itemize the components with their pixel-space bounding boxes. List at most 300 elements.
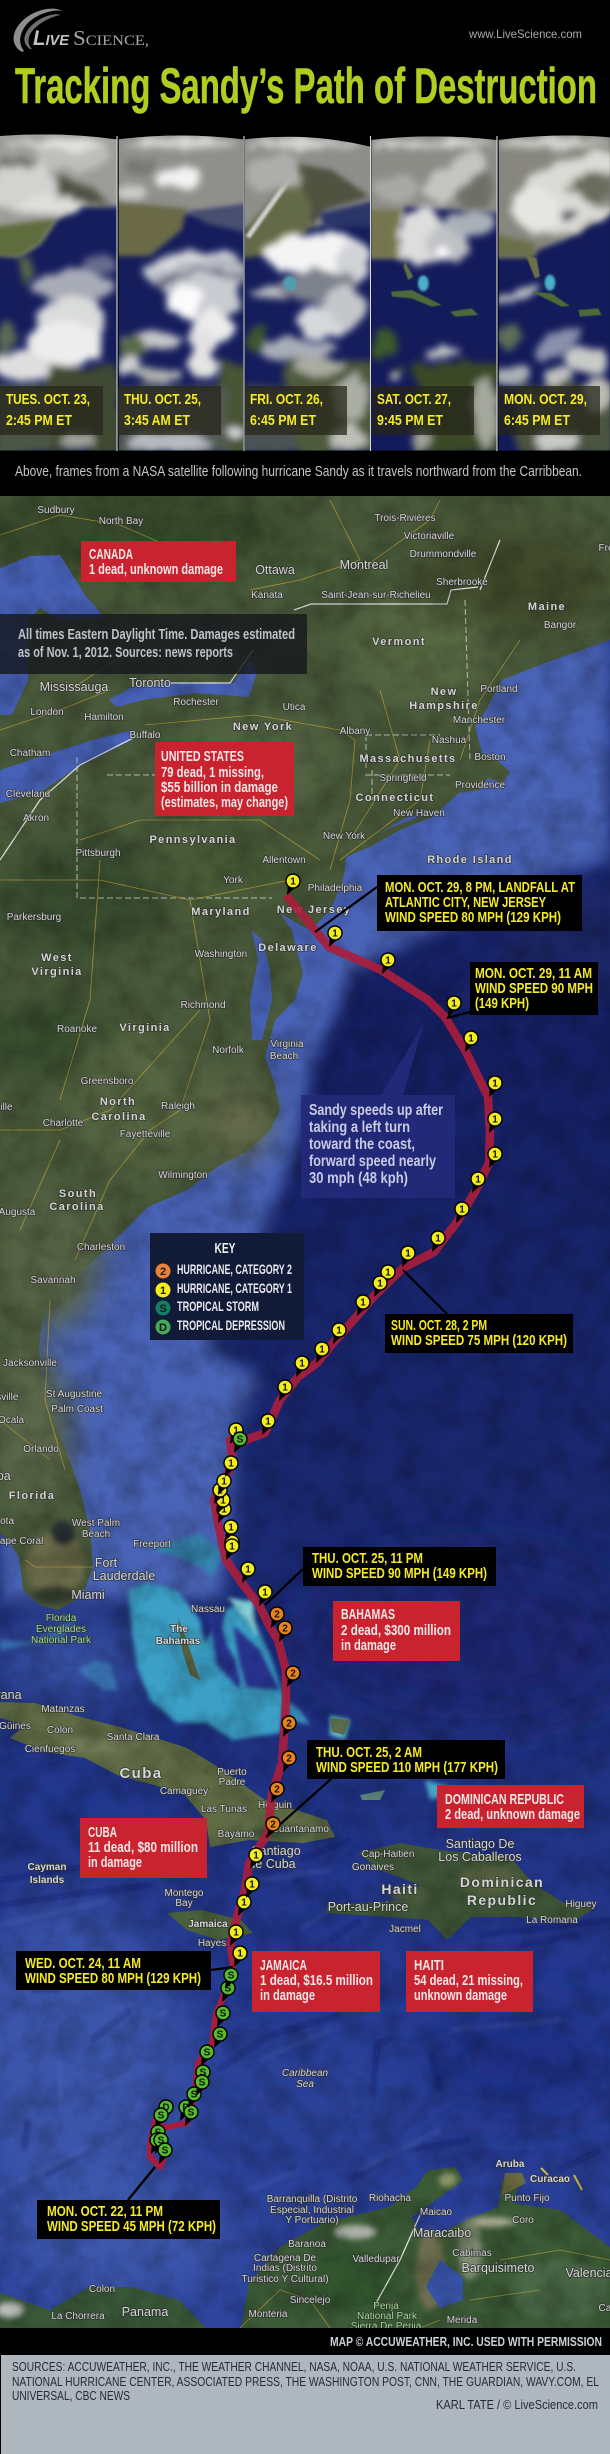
callout: Mon Oct 22: WIND SPEED 45 MPH (72 KPH) xyxy=(47,2218,216,2235)
map place labels: Roanoke xyxy=(57,1024,97,1035)
map place labels: Fort xyxy=(95,1556,118,1570)
map place labels: Norfolk xyxy=(212,1045,245,1056)
map place labels: Buffalo xyxy=(130,730,161,741)
map place labels: Boston xyxy=(474,752,506,763)
track markers: hurricane category 1: 1 xyxy=(229,1542,235,1552)
map place labels: Ottawa xyxy=(255,563,295,577)
map place labels: La Romana xyxy=(526,1915,578,1926)
map place labels: Baranoa xyxy=(288,2239,326,2250)
map place labels: Nassau xyxy=(191,1604,225,1615)
track markers: tropical depression and storm (south): S xyxy=(155,2128,162,2138)
track markers: hurricane category 1: 1 xyxy=(299,1358,305,1370)
callout: Wed Oct 24 xyxy=(16,1951,233,1990)
sources panel xyxy=(1,2355,610,2454)
track markers: hurricane category 1: 1 xyxy=(228,1458,234,1470)
map place labels: Chatham xyxy=(10,748,50,759)
date captions on frames: THU. OCT. 25, xyxy=(124,391,201,408)
callout: Sun Oct 28 xyxy=(385,1270,573,1353)
map place labels: Perija xyxy=(373,2301,399,2312)
map place labels: Indias (Distrito xyxy=(253,2263,317,2274)
callout: Thu Oct 25 11 PM: THU. OCT. 25, 11 PM xyxy=(312,1550,423,1567)
map place labels: Coro xyxy=(512,2215,534,2226)
map place labels: Especial, Industrial xyxy=(270,2205,354,2216)
map place labels: Savannah xyxy=(30,1275,76,1286)
track markers: hurricane category 1: 1 xyxy=(405,1248,411,1260)
callout: Cuba: CUBA xyxy=(88,1824,117,1841)
map place labels: Charleston xyxy=(77,1242,125,1253)
callout: Cuba: 11 dead, $80 million xyxy=(88,1839,198,1856)
date captions on frames xyxy=(0,386,600,435)
map place labels: Carolina xyxy=(91,1111,147,1123)
track markers: hurricane category 1: 1 xyxy=(265,1416,271,1428)
map place labels: Santiago xyxy=(251,1844,301,1858)
storm track: north section xyxy=(214,895,490,1947)
track markers: hurricane category 1: 1 xyxy=(385,956,391,966)
map place labels: Sea xyxy=(296,2079,314,2090)
map place labels: New xyxy=(431,686,457,698)
map place labels: Maicao xyxy=(420,2207,453,2218)
map place labels: Kanata xyxy=(251,590,283,601)
track markers: hurricane category 1: 1 xyxy=(229,1538,235,1548)
track marker: tropical storm near Florida: S xyxy=(237,1434,244,1446)
track markers: hurricane category 2: 2 xyxy=(286,1718,292,1730)
map place labels: La Chorrera xyxy=(51,2311,105,2322)
track markers: hurricane category 1: 1 xyxy=(468,1034,474,1044)
track markers: tropical depression and storm (south): S xyxy=(217,2030,224,2040)
map place labels: Orlando xyxy=(23,1444,59,1455)
map place labels: Higuey xyxy=(565,1899,597,1910)
track markers: hurricane category 2: 2 xyxy=(274,1610,280,1620)
map place labels: North Bay xyxy=(99,516,143,527)
map place labels: Dominican xyxy=(460,1874,544,1890)
map place labels: Florida xyxy=(46,1613,77,1624)
track markers: hurricane category 1: 1 xyxy=(492,1150,498,1160)
track markers: hurricane category 1: 1 xyxy=(459,1204,465,1216)
map place labels: Richmond xyxy=(180,1000,226,1011)
map place labels: St Augustine xyxy=(46,1389,103,1400)
key: category 1: HURRICANE, CATEGORY 1 xyxy=(177,1280,292,1296)
map place labels: Fayetteville xyxy=(120,1129,171,1140)
map place labels: Monteria xyxy=(249,2309,288,2320)
map place labels: Everglades xyxy=(36,1624,86,1635)
track markers: tropical depression and storm (south): S xyxy=(191,2090,198,2100)
map place labels: Pennsylvania xyxy=(149,834,237,846)
map place labels: Rochester xyxy=(173,697,219,708)
map place labels: New Haven xyxy=(393,808,445,819)
map place labels: West Palm xyxy=(72,1518,120,1529)
logo: LiveScience: SCIENCE, xyxy=(73,26,149,50)
ocean xyxy=(0,496,610,2328)
track markers: hurricane category 2: 2 xyxy=(270,1820,276,1830)
sources panel: UNIVERSAL, CBC NEWS xyxy=(12,2388,130,2403)
callout: Sandy speeds up xyxy=(301,1023,455,1198)
map place labels: Jamaica xyxy=(188,1919,228,1930)
map place labels: Beach xyxy=(82,1529,110,1540)
map place labels: Allentown xyxy=(262,855,306,866)
map place labels: de Cuba xyxy=(248,1857,296,1871)
callout: Bahamas: 2 dead, $300 million xyxy=(341,1622,451,1639)
map place labels: Hamilton xyxy=(84,712,124,723)
key: tropical depression: D xyxy=(159,1322,167,1334)
website url: www.LiveScience.com xyxy=(468,27,582,41)
map place labels: Jacksonville xyxy=(3,1358,57,1369)
key: tropical storm: TROPICAL STORM xyxy=(177,1298,259,1314)
track markers: hurricane category 1: 1 xyxy=(233,1426,239,1436)
callout: Sun Oct 28: SUN. OCT. 28, 2 PM xyxy=(391,1317,487,1334)
map place labels: Providence xyxy=(455,780,505,791)
map place labels: Albany xyxy=(340,726,370,737)
map place labels: Maracaibo xyxy=(413,2226,471,2240)
track markers: hurricane category 1: 1 xyxy=(435,1234,441,1244)
map place labels: Philadelphia xyxy=(308,883,363,894)
date captions on frames: MON. OCT. 29, xyxy=(504,391,587,408)
map place labels: Springfield xyxy=(379,773,427,784)
map place labels: Victoriaville xyxy=(404,531,455,542)
callout: Cuba xyxy=(80,1818,207,1878)
map place labels: London xyxy=(30,707,64,718)
callout: Haiti: 54 dead, 21 missing, xyxy=(414,1972,523,1989)
track markers: tropical depression and storm (south): S xyxy=(162,2146,169,2156)
date captions on frames: 2:45 PM ET xyxy=(6,412,72,429)
map place labels: Colon xyxy=(47,1725,73,1736)
map place labels: Riohacha xyxy=(369,2193,412,2204)
land: Cuba, Jamaica, Hispaniola xyxy=(0,1702,595,1940)
map place labels: Florida xyxy=(9,1490,55,1502)
track markers: hurricane category 2 xyxy=(266,1607,300,1838)
satellite frame: Sat. Oct. 27 xyxy=(371,136,496,451)
map place labels: Bangor xyxy=(544,620,577,631)
callout: Mon Oct 29 11 AM xyxy=(447,962,598,1018)
map place labels: Connecticut xyxy=(356,792,434,804)
key: KEY xyxy=(214,1240,236,1257)
map place labels: Haiti xyxy=(381,1881,419,1897)
map place labels: Guantanamo xyxy=(271,1824,329,1835)
track markers: hurricane category 1: 1 xyxy=(360,1298,366,1308)
map place labels: New Jersey xyxy=(277,904,351,916)
track markers: hurricane category 2: 2 xyxy=(286,1754,292,1764)
map place labels: Padre xyxy=(219,1777,246,1788)
key: tropical depression xyxy=(156,1317,285,1334)
satellite frame: Fri. Oct. 26 xyxy=(245,136,370,451)
map place labels: Curacao xyxy=(530,2174,570,2185)
key: category 1: 1 xyxy=(160,1285,166,1297)
map place labels: National Park xyxy=(31,1635,92,1646)
map place labels: Drummondville xyxy=(410,549,477,560)
callout: Canada: CANADA xyxy=(89,546,133,563)
date captions on frames: 3:45 AM ET xyxy=(124,412,190,429)
map place labels: Pittsburgh xyxy=(75,848,121,859)
callout: United States: $55 billion in damage xyxy=(161,779,278,796)
map place labels: Mississauga xyxy=(40,680,108,694)
track markers: hurricane category 1: 1 xyxy=(290,876,296,888)
map place labels: Montego xyxy=(165,1888,204,1899)
track markers: hurricane category 1 xyxy=(213,874,502,1967)
callout: Canada xyxy=(81,541,236,582)
track markers: tropical depression and storm (south): D xyxy=(182,2102,190,2114)
callout: landfall: ATLANTIC CITY, NEW JERSEY xyxy=(385,894,546,911)
track markers: tropical depression and storm (south): S xyxy=(225,1984,232,1994)
callout: Sandy speeds up: 30 mph (48 kph) xyxy=(309,1170,408,1187)
map place labels: Carolina xyxy=(49,1201,105,1213)
callout: Bahamas: BAHAMAS xyxy=(341,1606,395,1623)
map credit bar xyxy=(0,2328,610,2355)
map place labels: Valledupar xyxy=(352,2254,400,2265)
callout: United States: 79 dead, 1 missing, xyxy=(161,764,264,781)
map place labels: Colon xyxy=(89,2284,115,2295)
map place labels: Camaguey xyxy=(160,1786,208,1797)
callout: landfall xyxy=(315,875,582,932)
callout: Thu Oct 25 2 AM: THU. OCT. 25, 2 AM xyxy=(316,1744,422,1761)
map place labels: Barranquilla (Distrito xyxy=(267,2194,358,2205)
map place labels: New York xyxy=(233,721,293,733)
map place labels: Sudbury xyxy=(37,505,75,516)
callout: United States xyxy=(155,742,294,816)
track markers: hurricane category 1: 1 xyxy=(221,1476,227,1488)
date captions on frames: 9:45 PM ET xyxy=(377,412,443,429)
borders and roads xyxy=(0,500,520,1568)
track markers: tropical depression and storm (south): S xyxy=(200,2068,207,2078)
callout: Thu Oct 25 11 PM xyxy=(265,1547,496,1605)
satellite frame: Tues. Oct. 23 xyxy=(0,123,124,453)
map place labels: Maryland xyxy=(191,906,251,918)
map place labels: Greensboro xyxy=(81,1076,134,1087)
map place labels: Akron xyxy=(23,813,49,824)
map place labels: Portland xyxy=(480,684,518,695)
track markers: hurricane category 1: 1 xyxy=(237,1948,243,1960)
key: category 1 xyxy=(156,1280,292,1298)
map place labels: Raleigh xyxy=(161,1101,195,1112)
callout: United States: UNITED STATES xyxy=(161,748,244,765)
track markers: hurricane category 1: 1 xyxy=(475,1174,481,1186)
map place labels: Y Portuario) xyxy=(285,2215,339,2226)
track markers: tropical depression and storm (south): S xyxy=(154,2136,161,2146)
callout: Sandy speeds up: toward the coast, xyxy=(309,1136,415,1153)
map place labels: Nashua xyxy=(432,735,467,746)
callout: Sandy speeds up: taking a left turn xyxy=(309,1119,410,1136)
callout: Sandy speeds up: forward speed nearly xyxy=(309,1153,436,1170)
track markers: hurricane category 1: 1 xyxy=(332,928,338,940)
track markers: hurricane category 1: 1 xyxy=(282,1382,288,1394)
track markers: hurricane category 1: 1 xyxy=(319,1344,325,1356)
land: South America and Panama xyxy=(0,2167,610,2328)
track markers: hurricane category 2: 2 xyxy=(282,1624,288,1634)
map place labels: Hayes xyxy=(198,1938,226,1949)
track markers: hurricane category 1: 1 xyxy=(217,1486,223,1496)
track markers: tropical depression and storm (south) xyxy=(150,1968,238,2164)
callout: Haiti xyxy=(406,1951,533,2012)
logo: LiveScience xyxy=(14,9,149,52)
map place labels: Palm Coast xyxy=(51,1404,103,1415)
note: times and sources: as of Nov. 1, 2012. Sources: news reports xyxy=(18,644,233,661)
note: times and sources xyxy=(0,614,307,674)
map place labels: Virginia xyxy=(270,1039,304,1050)
key: tropical storm xyxy=(156,1298,259,1316)
date captions on frames: SAT. OCT. 27, xyxy=(377,391,451,408)
track markers: tropical depression and storm (south): S xyxy=(158,2136,165,2146)
callout: United States: (estimates, may change) xyxy=(161,794,288,811)
track markers: hurricane category 1: 1 xyxy=(241,1898,247,1908)
map place labels: Puerto xyxy=(217,1767,247,1778)
map xyxy=(0,490,610,2332)
map place labels: Cabimas xyxy=(452,2248,492,2259)
logo: LiveScience: LIVE xyxy=(33,27,70,50)
map place labels: Punto Fijo xyxy=(504,2193,550,2204)
callout: Haiti: unknown damage xyxy=(414,1987,507,2004)
date captions on frames: 6:45 PM ET xyxy=(504,412,570,429)
track markers: tropical depression and storm (south): S xyxy=(204,2048,211,2058)
callout: Bahamas xyxy=(333,1601,460,1661)
map place labels: Sincelejo xyxy=(290,2295,331,2306)
callout: Haiti: HAITI xyxy=(414,1957,444,1974)
seafloor ridges xyxy=(0,1840,610,2190)
callout: Sandy speeds up: Sandy speeds up after xyxy=(309,1102,443,1119)
map place labels: Jacmel xyxy=(389,1924,421,1935)
map place labels: Beach xyxy=(270,1051,298,1062)
track markers: hurricane category 1: 1 xyxy=(233,1928,239,1938)
callout: Thu Oct 25 2 AM xyxy=(266,1740,505,1837)
track markers: hurricane category 1: 1 xyxy=(492,1078,498,1090)
track marker: tropical storm near Florida xyxy=(233,1432,247,1453)
map place labels: Gonaives xyxy=(352,1862,394,1873)
map place labels: Delaware xyxy=(258,942,318,954)
map place labels: Santa Clara xyxy=(107,1732,160,1743)
map place labels: Holguin xyxy=(258,1800,292,1811)
key: tropical storm: S xyxy=(159,1303,167,1315)
track markers: hurricane category 2: 2 xyxy=(274,1784,280,1796)
date captions on frames: FRI. OCT. 26, xyxy=(250,391,323,408)
callout: Dominican Republic: DOMINICAN REPUBLIC xyxy=(445,1791,564,1808)
track markers: hurricane category 1: 1 xyxy=(221,1504,227,1516)
map place labels: Matanzas xyxy=(41,1704,85,1715)
map place labels: Trois-Rivières xyxy=(374,513,436,524)
callout: Thu Oct 25 2 AM: WIND SPEED 110 MPH (177 KPH) xyxy=(316,1759,498,1776)
land: North America xyxy=(0,490,610,1610)
track markers: hurricane category 1: 1 xyxy=(451,998,457,1010)
map place labels: Miami xyxy=(71,1588,105,1602)
map place labels: Parkersburg xyxy=(7,912,61,923)
map place labels: Republic xyxy=(467,1892,537,1908)
track markers: hurricane category 1: 1 xyxy=(262,1588,268,1598)
map place labels: Hampshire xyxy=(409,700,479,712)
callout: Cuba: in damage xyxy=(88,1854,142,1871)
track markers: tropical depression and storm (south): S xyxy=(228,1970,235,1982)
Bahamas deep channels xyxy=(207,1610,281,1693)
map place labels: Cleveland xyxy=(6,789,50,800)
map place labels: Saint-Jean-sur-Richelieu xyxy=(321,590,431,601)
map place labels: Cap-Haitien xyxy=(362,1849,414,1860)
map place labels: Turistico Y Cultural) xyxy=(241,2274,329,2285)
map place labels: Barquisimeto xyxy=(462,2261,535,2275)
date captions on frames: 6:45 PM ET xyxy=(250,412,316,429)
track markers: hurricane category 1: 1 xyxy=(377,1278,383,1290)
map place labels: National Park xyxy=(357,2311,418,2322)
note: times and sources: All times Eastern Daylight Time. Damages estimated xyxy=(18,626,295,643)
map place labels: Massachusetts xyxy=(359,753,457,765)
map place labels: Wilmington xyxy=(158,1170,208,1181)
map place labels: Aruba xyxy=(496,2159,525,2170)
map place labels: New York xyxy=(323,831,366,842)
track markers: hurricane category 1: 1 xyxy=(245,1564,251,1576)
callout: Jamaica: 1 dead, $16.5 million xyxy=(260,1972,373,1989)
map place labels: Bay xyxy=(175,1898,193,1909)
satellite photo strip xyxy=(0,123,610,453)
track markers: hurricane category 1: 1 xyxy=(249,1880,255,1890)
track markers: tropical depression and storm (south): S xyxy=(220,2008,227,2020)
map place labels: Virginia xyxy=(119,1022,171,1034)
map place labels: Lauderdale xyxy=(93,1569,155,1583)
map place labels: Panama xyxy=(122,2305,168,2319)
map place labels: Bayamo xyxy=(218,1829,255,1840)
track markers: tropical depression and storm (south): S xyxy=(158,2110,165,2122)
map place labels: North xyxy=(100,1096,136,1108)
map place labels: Güines xyxy=(0,1721,31,1732)
map place labels: South xyxy=(59,1188,97,1200)
track markers: hurricane category 1: 1 xyxy=(228,1522,234,1534)
key: category 2 xyxy=(156,1261,292,1278)
map place labels: Caribbean xyxy=(282,2068,329,2079)
callout: Mon Oct 22 xyxy=(37,2167,220,2239)
date captions on frames: TUES. OCT. 23, xyxy=(6,391,90,408)
map place labels: Sierra De Perija xyxy=(351,2321,422,2332)
map place labels: Islands xyxy=(30,1875,65,1886)
map place labels: Utica xyxy=(283,702,306,713)
callout: Dominican Republic xyxy=(437,1785,584,1828)
callout: landfall: WIND SPEED 80 MPH (129 KPH) xyxy=(385,909,561,926)
track markers: hurricane category 1: 1 xyxy=(253,1850,259,1862)
key: category 2: HURRICANE, CATEGORY 2 xyxy=(177,1261,292,1277)
water: lakes and bays xyxy=(0,555,432,1040)
map place labels: York xyxy=(223,875,244,886)
map place labels: Vermont xyxy=(372,636,426,648)
track markers: hurricane category 1: 1 xyxy=(492,1114,498,1126)
map place labels: Virginia xyxy=(31,966,83,978)
map place labels: Maine xyxy=(528,601,566,613)
texture overlay xyxy=(0,496,610,2328)
track markers: hurricane category 2: 2 xyxy=(290,1668,296,1680)
map place labels: Manchester xyxy=(453,715,506,726)
track markers: tropical depression and storm (south): D xyxy=(162,2102,170,2114)
track markers: tropical depression and storm (south): S xyxy=(188,2108,195,2118)
track markers: tropical depression and storm (south): S xyxy=(199,2078,206,2088)
satellite frame: Mon. Oct. 29 xyxy=(492,123,610,453)
map place labels: The xyxy=(170,1624,188,1635)
map place labels: Santiago De xyxy=(446,1837,514,1851)
map place labels: Sherbrooke xyxy=(436,577,488,588)
map place labels xyxy=(0,505,610,2332)
satellite frame: Thu. Oct. 25 xyxy=(118,136,244,451)
map place labels: Los Caballeros xyxy=(438,1850,522,1864)
key xyxy=(150,1233,304,1340)
callout: Jamaica: in damage xyxy=(260,1987,315,2004)
callout: Canada: 1 dead, unknown damage xyxy=(89,561,223,578)
storm track: south section xyxy=(150,1947,233,2167)
track markers: hurricane category 1: 1 xyxy=(336,1326,342,1336)
map place labels: Rhode Island xyxy=(427,854,513,866)
callout: Jamaica: JAMAICA xyxy=(260,1957,307,1974)
map place labels: Cuba xyxy=(119,1765,163,1782)
map place labels: Cartagena De xyxy=(254,2253,317,2264)
map place labels: Toronto xyxy=(129,676,171,690)
callout: Jamaica xyxy=(252,1951,380,2012)
map place labels: Charlotte xyxy=(43,1118,84,1129)
callout: Bahamas: in damage xyxy=(341,1637,396,1654)
map place labels: Freeport xyxy=(133,1539,171,1550)
map place labels: Merida xyxy=(447,2315,478,2326)
map place labels: Washington xyxy=(195,949,247,960)
map place labels: Bahamas xyxy=(156,1636,201,1647)
track markers: hurricane category 1: 1 xyxy=(220,1496,226,1506)
map place labels: Las Tunas xyxy=(201,1804,247,1815)
